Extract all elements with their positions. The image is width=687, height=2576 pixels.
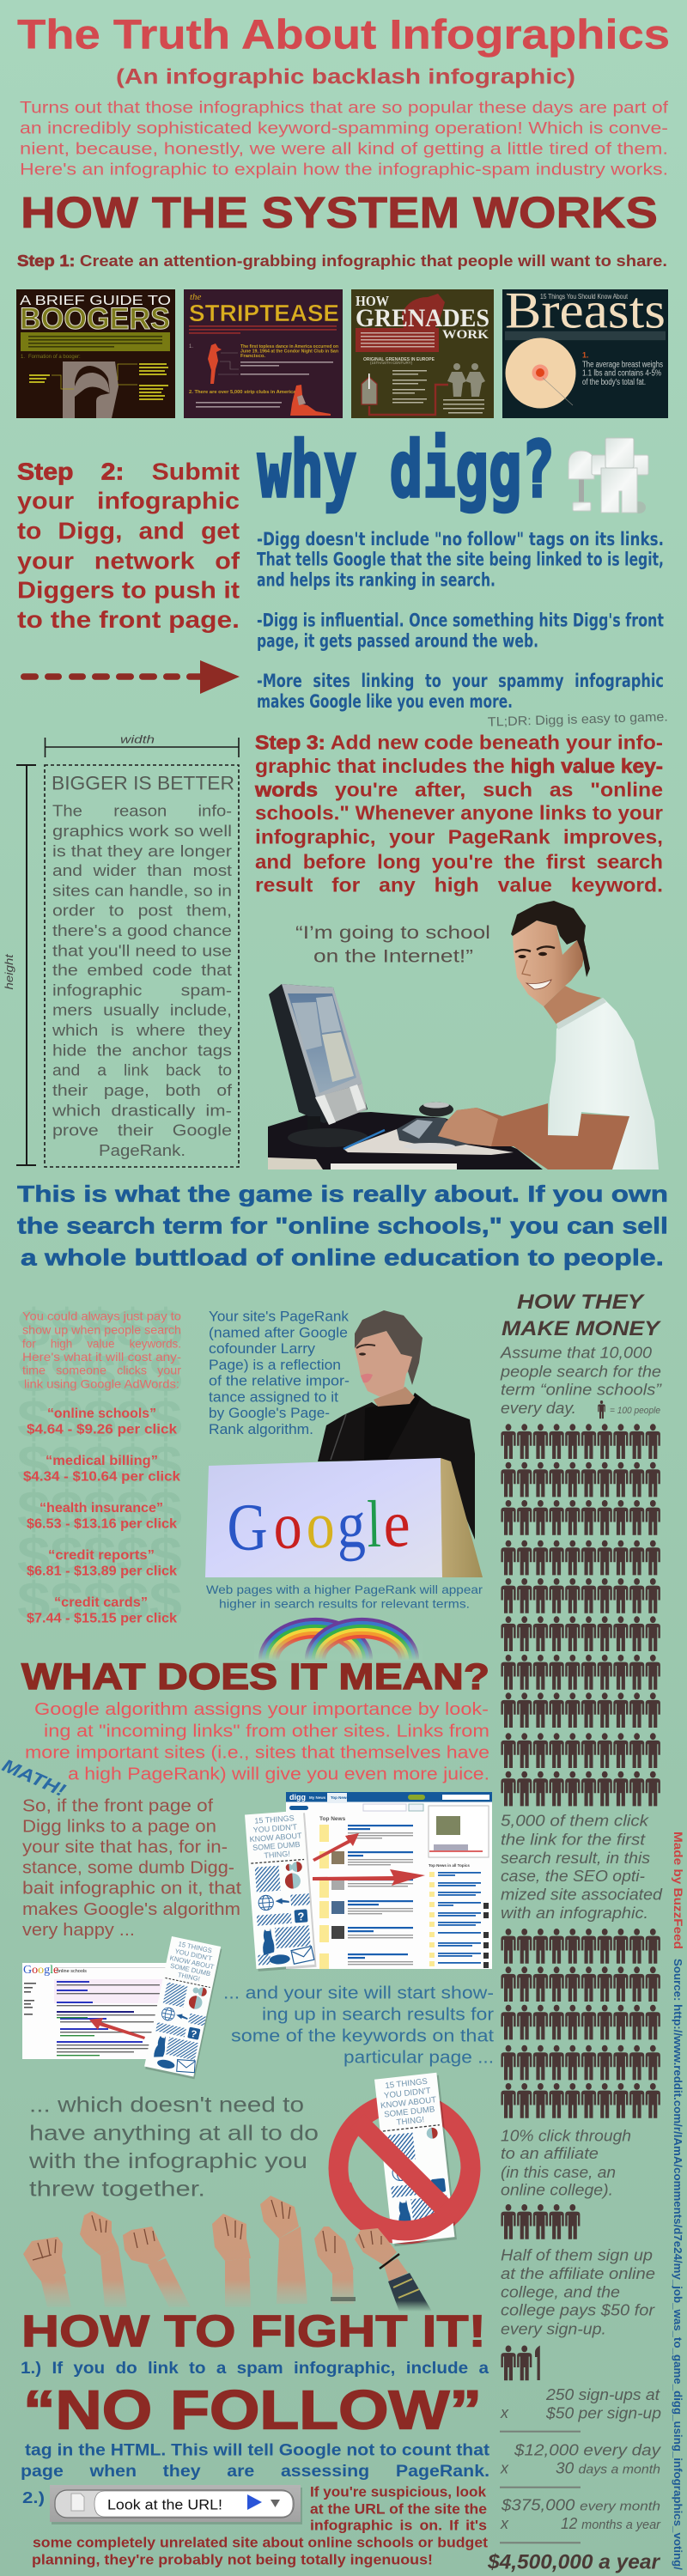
icon: prohibited infographic: 15 THINGS <box>385 2077 428 2091</box>
10 percent text: (in this case, an <box>501 2164 616 2181</box>
pictogram: 500 affiliates <box>501 2204 580 2239</box>
infographic strip: digg: ? <box>297 1910 305 1923</box>
panel: striptease infographic thumbnail: Francisco. <box>240 354 265 359</box>
panel: adwords cost list: $$$$$ <box>17 1299 182 1358</box>
panel: grenades infographic thumbnail: ORIGINAL GRENADES IN EUROPE <box>363 357 435 362</box>
which doesn't need paragraph: ... which doesn't need to <box>29 2093 304 2117</box>
legend: one icon equals 100 people: = 100 people <box>610 1406 660 1416</box>
step 2 text: your infographic <box>17 488 240 514</box>
credit: made by buzzfeed: Made by BuzzFeed <box>672 1832 684 1949</box>
intro paragraph: Turns out that those infographics that are so popular these days are part of <box>20 98 669 117</box>
photo: raised fists <box>23 2196 432 2312</box>
heading: how they make money: MAKE MONEY <box>502 1317 661 1340</box>
infographic strip: digg: 15 THINGS <box>254 1814 295 1826</box>
step 2 text: to Digg, and get <box>17 518 240 544</box>
assumption text: Assume that 10,000 <box>500 1345 652 1362</box>
5,000 text: search result, in this <box>501 1850 650 1867</box>
step 2 text: Diggers to push it <box>17 577 240 604</box>
panel: adwords cost list: $$$$$ <box>17 1481 182 1540</box>
tip 1 intro: 1.) If you do link to a spam infographic, include a <box>21 2360 489 2378</box>
step 3 text: graphic that includes the high value key- <box>255 755 663 777</box>
pagerank explanation: Your site's PageRank <box>209 1309 350 1324</box>
icon: browser url bar <box>50 2485 302 2524</box>
10 percent text <box>501 2127 631 2199</box>
tip 2 text: planning, they're probably not being totally ingenuous! <box>32 2553 433 2568</box>
panel: how they make money <box>487 1291 663 2574</box>
so if paragraph: makes Google's algorithm <box>22 1899 240 1919</box>
panel: digg screenshot: My News <box>309 1795 326 1800</box>
step 3 text: result for any high value keyword. <box>255 873 663 896</box>
panel: bigger is better: mers usually include, <box>52 1001 232 1019</box>
intro paragraph: nient, because, honestly, we were all kind of getting a little tired of them. <box>20 139 668 158</box>
heading: how they make money: HOW THEY <box>517 1291 645 1314</box>
step 2 text: to the front page. <box>17 606 240 633</box>
panel: adwords cost list: for high value keywords. <box>22 1336 181 1350</box>
panel: boogers infographic thumbnail: Formation of a booger: <box>28 355 81 360</box>
half sign up text: Half of them sign up <box>501 2247 653 2264</box>
icon: browser url bar: Look at the URL! <box>107 2497 222 2513</box>
panel: breasts infographic thumbnail: Breasts <box>505 282 666 338</box>
pagerank explanation: Rank algorithm. <box>209 1422 313 1437</box>
photo: larry page at google podium: l <box>367 1486 381 1561</box>
tip 2 text: some completely unrelated site about online schools or budget <box>33 2536 489 2551</box>
revenue calculation: x <box>500 2515 509 2532</box>
pictogram: 5,000 clickers <box>501 1929 660 2118</box>
panel: boogers infographic thumbnail: BOOGERS <box>20 302 170 336</box>
panel: adwords cost list: $$$$$ <box>17 1345 182 1404</box>
panel: breasts infographic thumbnail: of the body's total fat. <box>582 378 646 387</box>
panel: adwords cost list: You could always just pay to <box>22 1309 181 1322</box>
panel: adwords cost list: $$$$$ <box>17 1390 182 1449</box>
photo: larry page at google podium: e <box>383 1485 410 1561</box>
panel: striptease infographic thumbnail: the <box>190 292 202 302</box>
dimension: width: width <box>120 733 155 746</box>
revenue calculation: $375,000 every month <box>501 2496 660 2513</box>
panel: adwords cost list: “credit reports” <box>48 1548 155 1563</box>
arrow: dashed red arrow <box>21 660 240 694</box>
infographic strip: digg <box>245 1810 317 1971</box>
revenue calculation: $50 per sign-up <box>545 2405 661 2422</box>
google algorithm paragraph: ing at "incoming links" from other sites. Links from <box>44 1722 489 1741</box>
pagerank caption: Web pages with a higher PageRank will appear <box>206 1583 483 1596</box>
panel: bigger is better: their page, both of <box>52 1081 233 1099</box>
so if paragraph: very happy ... <box>22 1920 135 1940</box>
intro paragraph <box>20 98 669 179</box>
panel: boogers infographic thumbnail <box>16 289 175 418</box>
infographic strip: google: KNOW ABOUT <box>169 1954 215 1971</box>
panel: bigger is better: that you'll need to use <box>52 941 232 959</box>
revenue calculation <box>500 2386 661 2543</box>
panel: adwords cost list: “credit cards” <box>54 1595 148 1610</box>
pagerank explanation: tance assigned to it <box>209 1389 338 1405</box>
panel: striptease infographic thumbnail: The first topless dance in America occurred on <box>240 344 338 349</box>
half sign up text: college, and the <box>501 2284 620 2301</box>
icon: prohibited infographic: YOU DIDN'T <box>384 2087 431 2101</box>
panel: striptease infographic thumbnail: June 19, 1964 at the Condor Night Club in San <box>240 349 338 354</box>
step 2 text: your network of <box>17 547 240 574</box>
panel: bigger is better: the embed code that <box>52 961 232 979</box>
panel: google results screenshot <box>22 1963 167 2059</box>
revenue calculation: x <box>500 2460 509 2477</box>
step 1 text: Step 1: Create an attention-grabbing infographic that people will want to share. <box>17 252 667 270</box>
icon: double rainbow <box>254 1619 423 1661</box>
panel: bigger is better: which drastically im- <box>52 1101 232 1119</box>
note: math: MATH! <box>0 1756 69 1801</box>
infographic strip: google: THING! <box>177 1971 201 1983</box>
so if paragraph: bait infographic on it, that <box>22 1879 241 1899</box>
10 percent text: 10% click through <box>501 2127 631 2144</box>
icon: prohibited infographic: THING! <box>396 2115 425 2128</box>
panel: breasts infographic thumbnail: The average breast weighs <box>582 361 663 370</box>
5,000 text: with an infographic. <box>501 1905 648 1922</box>
step 3 text: infographic, your PageRank improves, <box>255 826 663 848</box>
infographic strip: google <box>144 1936 222 2079</box>
panel: bigger is better: there's a good chance <box>52 921 232 939</box>
panel: boogers infographic thumbnail: 1. <box>21 355 25 360</box>
and your site paragraph: some of the keywords on that <box>231 2026 494 2045</box>
and your site paragraph <box>223 1983 494 2067</box>
so if paragraph: your site that has, for in- <box>22 1837 228 1856</box>
step 3 text: Step 3: Add new code beneath your info- <box>255 732 663 754</box>
pagerank explanation: (named after Google <box>209 1325 348 1340</box>
photo: larry page at google podium: G <box>227 1489 268 1564</box>
panel: bigger is better: which is where they <box>52 1021 233 1039</box>
panel: adwords cost list: $7.44 - $15.15 per click <box>27 1611 177 1625</box>
panel: digg screenshot: digg <box>289 1793 306 1801</box>
quote: going to school on the internet <box>295 923 490 967</box>
photo: man at computer <box>268 901 659 1170</box>
source url: Source: http://www.reddit.com/r/IAmA/comments/d7e24/my_job_was_to_game_digg_using_infographics_voting/ <box>672 1959 684 2570</box>
panel: grenades infographic thumbnail: (15TH/16TH CENTURY) <box>370 361 413 365</box>
panel: breasts infographic thumbnail: 1. <box>582 351 589 360</box>
arrows: red arrows on screenshots <box>89 1833 425 2039</box>
which doesn't need paragraph: threw together. <box>29 2177 205 2201</box>
big text: no follow: “NO FOLLOW” <box>23 2379 482 2440</box>
panel: grenades infographic thumbnail: GRENADES <box>356 304 489 332</box>
panel: bigger is better: and wider than most <box>52 861 232 879</box>
google algorithm paragraph <box>25 1700 489 1784</box>
revenue calculation: 12 months a year <box>561 2515 661 2532</box>
panel: adwords cost list: “health insurance” <box>40 1501 163 1516</box>
panel: adwords cost list: $$$$$ <box>17 1572 182 1631</box>
quote: going to school on the internet: on the Internet!” <box>313 947 473 967</box>
panel: adwords cost list: $6.53 - $13.16 per click <box>27 1516 177 1531</box>
photo: larry page at google podium: o <box>273 1487 302 1563</box>
tl;dr note: TL;DR: Digg is easy to game. <box>488 709 668 730</box>
intro paragraph: Here's an infographic to explain how the infographic-spam industry works. <box>20 160 668 179</box>
panel: bigger is better <box>45 765 239 1167</box>
panel: digg screenshot <box>286 1792 492 1969</box>
infographic strip: digg: THING! <box>264 1850 290 1860</box>
panel: adwords cost list: $6.81 - $13.89 per click <box>27 1564 177 1578</box>
so if paragraph: Digg links to a page on <box>22 1816 216 1836</box>
step 3 text: schools." Whenever anyone links to your <box>255 802 663 824</box>
panel: adwords cost list <box>17 1299 182 1631</box>
panel: adwords cost list: show up when people search <box>22 1322 181 1336</box>
pictogram: 250 signups <box>501 2346 540 2380</box>
panel: adwords cost list: $4.34 - $10.64 per click <box>23 1469 180 1484</box>
half sign up text: every sign-up. <box>501 2320 606 2337</box>
step 3 text: and before long you're the first search <box>255 851 663 873</box>
panel: striptease infographic thumbnail: STRIPTEASE <box>189 300 339 326</box>
tip 2 text <box>32 2484 489 2568</box>
panel: breasts infographic thumbnail <box>502 282 668 418</box>
pagerank caption <box>206 1583 483 1611</box>
assumption text: term “online schools” <box>501 1381 662 1398</box>
why digg bullet list: and helps its ranking in search. <box>257 569 495 590</box>
pictogram: 10,000 searchers <box>501 1424 660 1806</box>
title: The Truth About Infographics <box>17 13 670 58</box>
step 2 text <box>17 458 240 633</box>
panel: bigger is better: prove their Google <box>52 1121 232 1139</box>
infographic strip: google: ? <box>190 2029 198 2040</box>
quote: going to school on the internet: “I’m going to school <box>295 923 490 943</box>
panel: bigger is better: sites can handle, so in <box>52 881 232 899</box>
infographic strip: google: SOME DUMB <box>169 1962 211 1978</box>
panel: digg screenshot: Top News <box>331 1795 349 1800</box>
5,000 text <box>501 1813 663 1922</box>
heading: why digg: why digg? <box>258 425 555 515</box>
10 percent text: to an affiliate <box>501 2145 599 2162</box>
dimension: height <box>3 765 36 1165</box>
google algorithm paragraph: a high PageRank) will give you even more juice. <box>68 1765 489 1784</box>
photo: larry page at google podium: g <box>337 1486 366 1562</box>
blue statement: This is what the game is really about. If you own <box>17 1181 668 1206</box>
subtitle: (An infographic backlash infographic) <box>116 65 575 89</box>
icon: prohibited infographic: SOME DUMB <box>384 2105 435 2120</box>
panel: grenades infographic thumbnail: WORK <box>442 328 489 342</box>
infographic strip: digg: KNOW ABOUT <box>249 1832 302 1844</box>
which doesn't need paragraph <box>28 2093 319 2201</box>
so if paragraph <box>22 1795 241 1940</box>
5,000 text: 5,000 of them click <box>501 1813 649 1830</box>
which doesn't need paragraph: with the infographic you <box>28 2149 307 2173</box>
panel: bigger is better: graphics work so well <box>52 822 232 840</box>
panel: adwords cost list: $4.64 - $9.26 per click <box>27 1422 177 1437</box>
dimension: height: height <box>3 953 15 989</box>
assumption text: people search for the <box>500 1363 661 1380</box>
10 percent text: online college). <box>501 2182 613 2199</box>
5,000 text: case, the SEO opti- <box>501 1868 645 1885</box>
tip 2 text: infographic is on. If it's <box>310 2518 487 2534</box>
so if paragraph: stance, some dumb Digg- <box>22 1858 234 1878</box>
icon: prohibited infographic: KNOW ABOUT <box>380 2095 437 2111</box>
revenue calculation: 250 sign-ups at <box>545 2386 660 2403</box>
photo: larry page at google podium <box>205 1310 483 1577</box>
intro paragraph: an incredibly sophisticated keyword-spamming operation! Which is conve- <box>20 118 668 137</box>
panel: bigger is better: is that they are longer <box>52 841 232 860</box>
and your site paragraph: ing up in search results for <box>262 2004 494 2024</box>
panel: bigger is better: order to post them, <box>52 902 232 920</box>
pagerank explanation: by Google's Page- <box>209 1406 330 1421</box>
icon: digg guy with shovel <box>568 438 648 513</box>
panel: breasts infographic thumbnail: 1.1 lbs and contains 4-5% <box>582 369 661 379</box>
infographic strip: google: YOU DIDN'T <box>174 1947 213 1963</box>
pagerank explanation: cofounder Larry <box>209 1341 316 1357</box>
panel: bigger is better: hide the anchor tags <box>52 1041 232 1059</box>
assumption text <box>500 1345 662 1417</box>
panel: adwords cost list: time someone clicks your <box>22 1364 181 1377</box>
total: $4,500,000 a year <box>487 2551 661 2574</box>
panel: bigger is better: The reason info- <box>52 802 232 820</box>
half sign up text: at the affiliate online <box>501 2265 655 2282</box>
and your site paragraph: particular page ... <box>344 2047 494 2067</box>
panel: adwords cost list: “medical billing” <box>46 1454 158 1468</box>
blue statement: a whole buttload of online education to people. <box>21 1244 664 1270</box>
panel: boogers infographic thumbnail: A BRIEF GUIDE TO <box>20 294 171 308</box>
5,000 text: the link for the first <box>501 1831 646 1848</box>
pagerank explanation <box>209 1309 350 1437</box>
panel: adwords cost list: link using Google AdWords: <box>24 1377 179 1391</box>
half sign up text: college pays $50 for <box>501 2302 655 2319</box>
and your site paragraph: ... and your site will start show- <box>223 1983 494 2002</box>
which doesn't need paragraph: have anything at all to do <box>29 2122 319 2146</box>
panel: bigger is better: PageRank. <box>99 1141 185 1159</box>
tip 1 explanation <box>21 2441 490 2481</box>
google algorithm paragraph: more important sites (i.e., sites that themselves have <box>25 1744 489 1763</box>
infographic strip: digg: YOU DIDN'T <box>252 1822 298 1834</box>
panel: bigger is better: and a link back to <box>52 1061 232 1079</box>
infographic strip: google: 15 THINGS <box>178 1940 213 1954</box>
panel: breasts infographic thumbnail: 15 Things You Should Know About <box>540 292 628 301</box>
panel: adwords cost list: Here's what it will cost any- <box>22 1350 181 1364</box>
heading: what does it mean: WHAT DOES IT MEAN? <box>21 1656 489 1698</box>
blue statement: the search term for "online schools," you can sell <box>17 1213 668 1239</box>
why digg bullet list: page, it gets passed around the web. <box>257 630 538 651</box>
pagerank explanation: Page) is a reflection <box>209 1358 341 1373</box>
pagerank caption: higher in search results for relevant terms. <box>219 1597 470 1611</box>
tip 2 number: 2.) <box>22 2489 45 2506</box>
panel: striptease infographic thumbnail <box>184 289 343 418</box>
tip 1 explanation: page when they are assessing PageRank. <box>21 2463 489 2481</box>
heading: how to fight it: HOW TO FIGHT IT! <box>21 2306 486 2356</box>
infographic strip: digg: SOME DUMB <box>252 1840 301 1852</box>
panel: adwords cost list: $$$$$ <box>17 1436 182 1495</box>
so if paragraph: So, if the front page of <box>22 1795 213 1815</box>
heading: how they make money <box>502 1291 661 1340</box>
step 2 text: Step 2: Submit <box>17 458 240 484</box>
tip 2 text: If you're suspicious, look <box>310 2484 487 2500</box>
panel: adwords cost list: $$$$$ <box>17 1527 182 1586</box>
blue statement <box>17 1181 668 1270</box>
panel: grenades infographic thumbnail: HOW <box>356 293 389 309</box>
panel: google results screenshot: online schools <box>57 1969 87 1974</box>
revenue calculation: 30 days a month <box>556 2460 660 2477</box>
revenue calculation: $12,000 every day <box>514 2441 661 2458</box>
why digg bullet list <box>257 529 664 712</box>
panel: google results screenshot: Google <box>23 1964 58 1977</box>
revenue calculation: x <box>500 2404 509 2421</box>
heading: how the system works: HOW THE SYSTEM WORKS <box>21 188 658 237</box>
icon: prohibited infographic <box>338 2072 471 2246</box>
panel: striptease infographic thumbnail: 2. There are over 5,000 strip clubs in America. <box>189 390 297 395</box>
panel: bigger is better: infographic spam- <box>52 981 232 999</box>
why digg bullet list: makes Google like you even more. <box>257 691 513 712</box>
step 3 text: words you're after, such as "online <box>254 778 663 800</box>
dimension: width <box>45 733 239 757</box>
panel: digg screenshot: Top News <box>319 1816 346 1822</box>
panel: adwords cost list: “online schools” <box>47 1406 156 1421</box>
photo: larry page at google podium: o <box>306 1487 335 1562</box>
pagerank explanation: of the relative impor- <box>209 1373 350 1388</box>
step 3 text <box>254 732 663 896</box>
half sign up text <box>501 2247 655 2337</box>
5,000 text: mized site associated <box>501 1886 663 1904</box>
tip 2 text: at the URL of the site the <box>310 2501 487 2517</box>
tip 1 explanation: tag in the HTML. This will tell Google not to count that <box>25 2441 490 2459</box>
panel: striptease infographic thumbnail: 1. <box>189 344 193 349</box>
google algorithm paragraph: Google algorithm assigns your importance by look- <box>34 1700 489 1719</box>
legend: one icon equals 100 people <box>598 1400 660 1419</box>
panel: digg screenshot: Top News in all Topics <box>429 1863 470 1868</box>
panel: grenades infographic thumbnail <box>351 289 494 418</box>
assumption text: every day. <box>501 1400 576 1417</box>
panel: bigger is better: BIGGER IS BETTER <box>52 772 234 793</box>
